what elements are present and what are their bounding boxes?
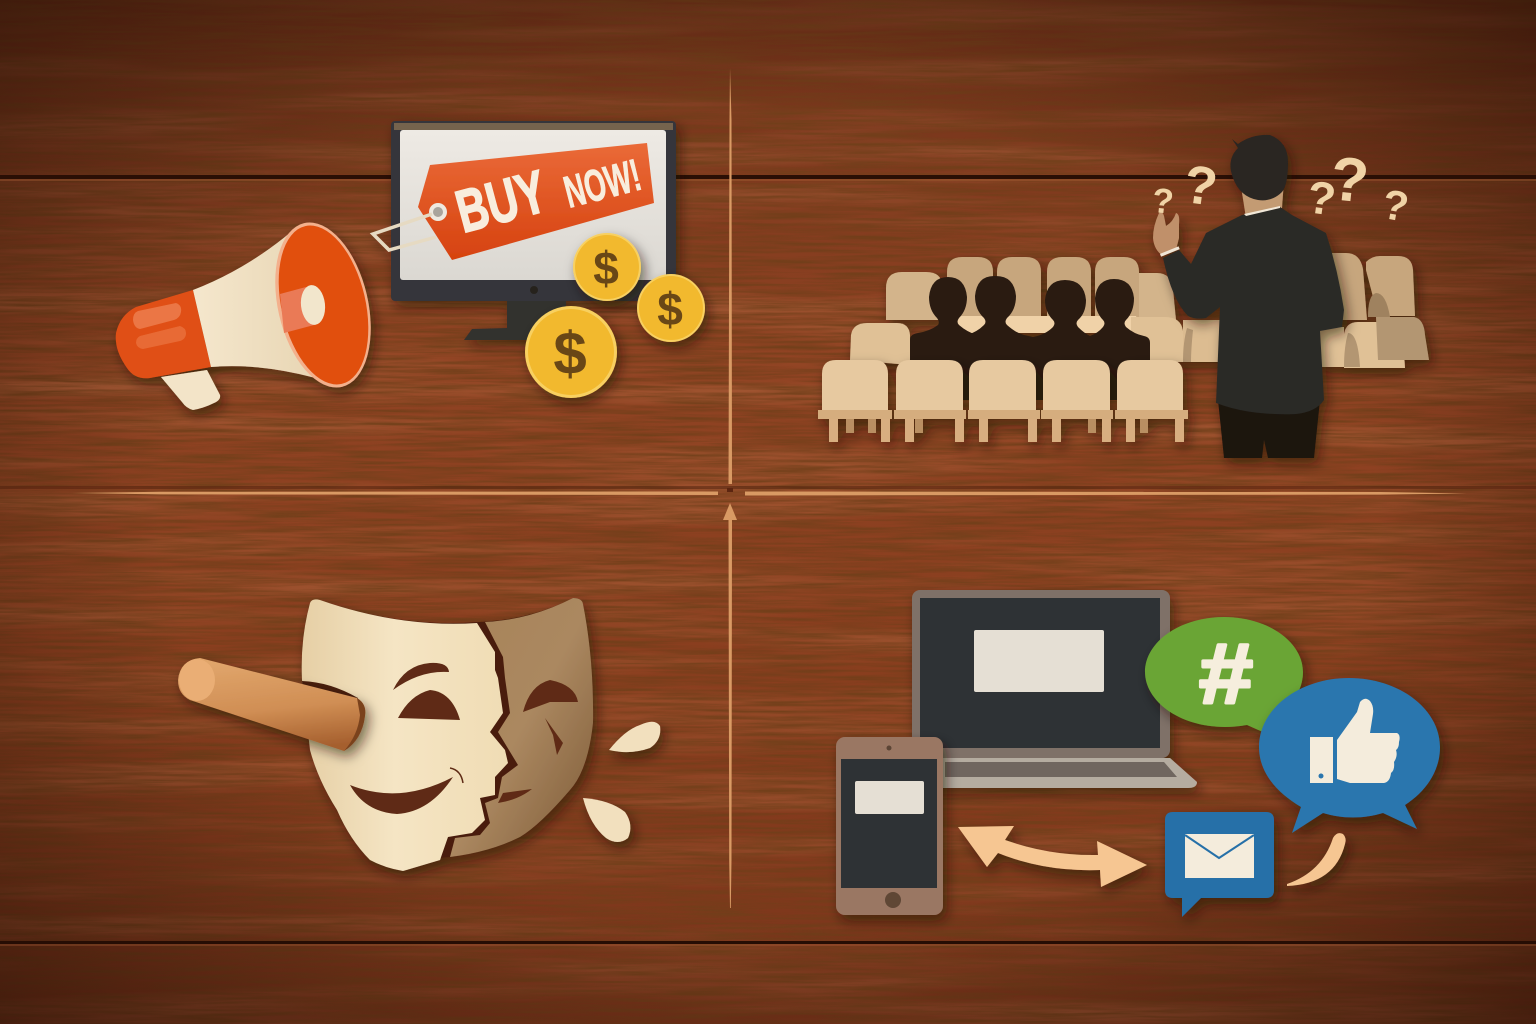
quadrant axes [72,68,1467,908]
blue like bubble [1259,678,1440,833]
icon: thumbs up [1310,699,1400,783]
megaphone cone [193,226,342,386]
price tag: BUY [449,158,553,246]
question marks: ? [1327,144,1372,217]
question marks: ? [1180,154,1221,218]
mask dark half [450,598,593,857]
laptop [912,590,1197,788]
question marks: ? [1150,181,1176,222]
jacket [1163,207,1344,414]
price tag: NOW! [559,149,646,218]
question marks: ? [1304,170,1339,226]
mask features [350,663,578,814]
green hash bubble [1145,617,1303,740]
trousers [1218,400,1320,458]
hand [1153,212,1179,256]
neck [1240,180,1284,218]
question marks: ? [1379,180,1412,231]
envelope bubble [1165,812,1274,917]
megaphone handle [161,370,220,410]
monitor screen [400,130,666,280]
question marks [1150,144,1412,231]
icon: megaphone [116,213,386,410]
highlights [133,303,186,349]
front row seats [818,360,1188,442]
icon: coins: $ [593,242,619,294]
megaphone back [116,290,211,378]
audience silhouettes [910,276,1150,400]
icon: coins [525,233,705,398]
nose [178,658,365,751]
green hash bubble: # [1199,627,1253,722]
icon: monitor with buy now tag [373,121,676,340]
monitor stand [464,300,566,340]
monitor frame [391,121,676,301]
icon: coins: $ [553,320,587,387]
double arrow [958,826,1147,887]
audience seats: back rows [850,253,1429,368]
tear drops [583,722,660,842]
presenter [1153,135,1344,458]
theater mask [302,598,593,871]
bell rim [260,213,386,397]
curved connector [1287,833,1346,886]
mask light half [302,599,508,871]
mask dark backing [302,598,593,871]
hair [1230,135,1288,200]
icon: coins: $ [657,283,683,335]
price tag [373,143,654,260]
phone [836,737,943,915]
speaker cylinder [280,287,314,333]
